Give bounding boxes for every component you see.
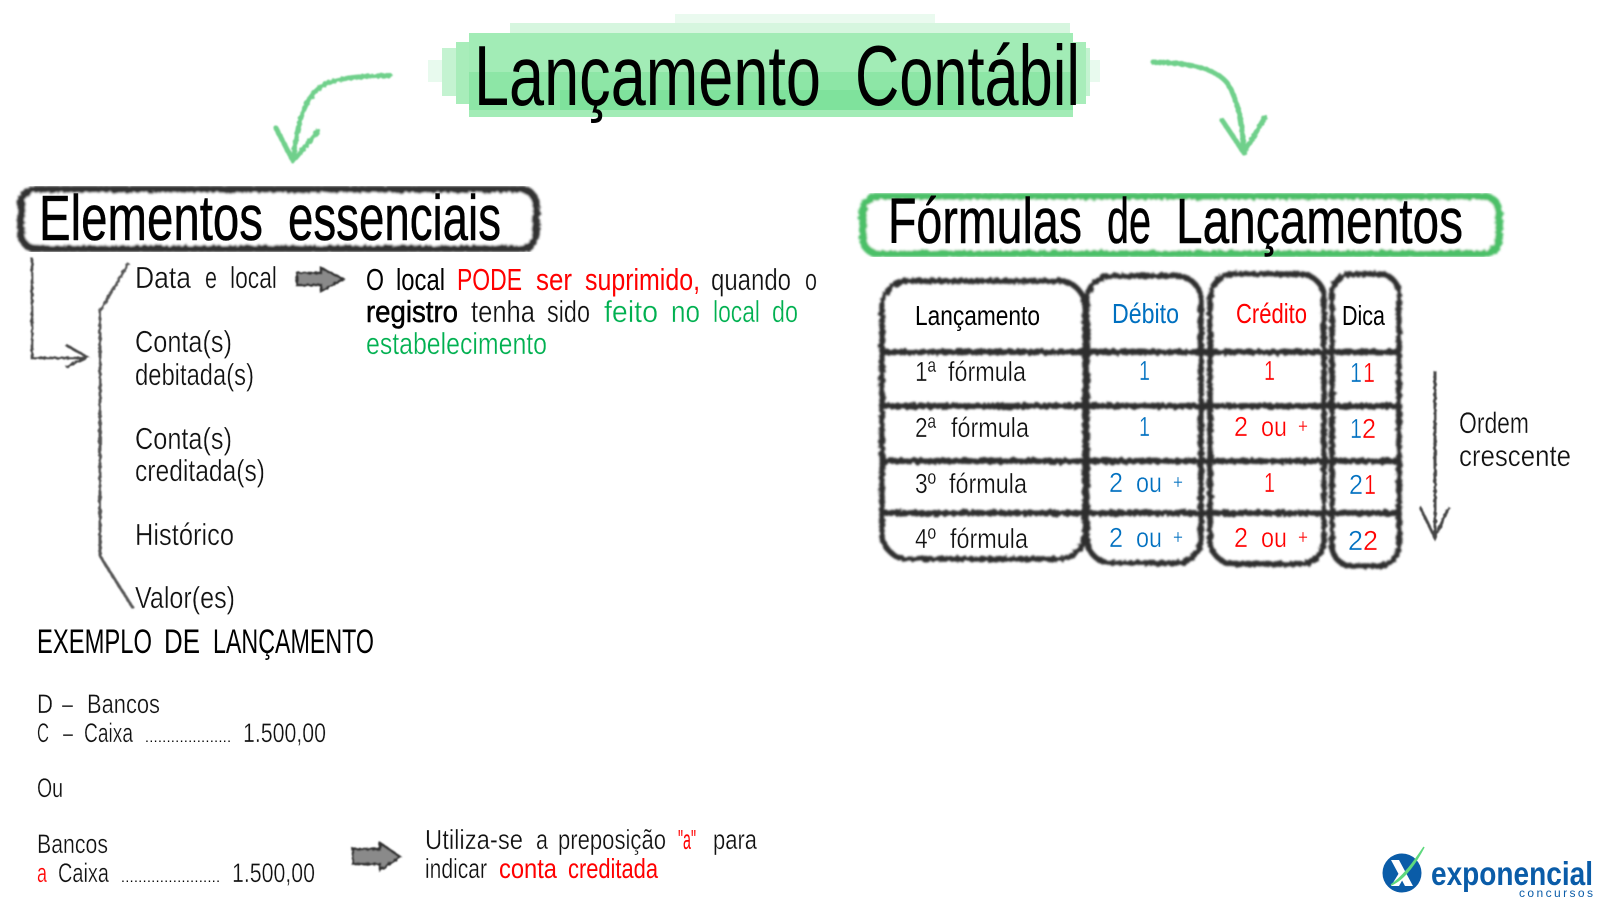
table: row 2: fórmula [951, 412, 1029, 443]
table: row 2 [915, 411, 1376, 444]
example entry 1: 1.500,00 [243, 718, 326, 748]
table: row 2: ou [1261, 411, 1287, 442]
arrow: title to Fórmulas de Lançamentos [1153, 62, 1265, 153]
table: row 2: 2ª [915, 412, 937, 443]
table: row 3: 1 [1364, 469, 1376, 500]
list of essential elements: e [205, 260, 217, 295]
heading text [39, 182, 501, 254]
note on preposition: preposição [558, 824, 666, 855]
table: row 3: 2 [1109, 467, 1123, 498]
table: row 1: 1 [1264, 355, 1275, 386]
table: column headers [915, 298, 1385, 331]
table: row 2: 2 [1362, 413, 1376, 444]
note on local: registro [366, 294, 458, 329]
table: row 4: 2 [1348, 525, 1363, 556]
note on local: ser [536, 262, 572, 297]
icon: gray arrow to note [297, 268, 343, 291]
example entry 1: C [37, 718, 49, 748]
example heading [37, 623, 374, 661]
example entry 2: 1.500,00 [232, 858, 315, 888]
table: row 2: 2 [1234, 411, 1248, 442]
list of essential elements [135, 260, 277, 615]
table: row 2: + [1298, 416, 1308, 438]
heading text: Elementos [39, 182, 263, 254]
table: row 1: fórmula [948, 356, 1026, 387]
example heading: LANÇAMENTO [213, 623, 374, 661]
table: row 1: 1 [1350, 357, 1362, 388]
note on local: quando [711, 262, 791, 297]
list of essential elements: debitada(s) [135, 357, 254, 392]
bracket around element list [100, 263, 133, 608]
label: ascending order: crescente [1459, 440, 1571, 473]
heading frame [863, 196, 1499, 254]
arrow: heading to list [32, 258, 87, 367]
example entry 1 [37, 689, 326, 748]
note on preposition [425, 824, 757, 884]
example entry 1: – [62, 689, 73, 719]
note on local: local [713, 294, 760, 329]
note on local: feito [604, 294, 658, 329]
heading text [888, 185, 1463, 257]
heading text: essenciais [288, 182, 501, 254]
note on preposition: a [536, 824, 548, 855]
logo icon [1382, 847, 1424, 892]
table: row 3: 1 [1264, 467, 1275, 498]
example heading: DE [164, 623, 200, 661]
example entry 2 [37, 829, 315, 888]
list of essential elements: creditada(s) [135, 453, 265, 488]
table: row 4: + [1298, 527, 1308, 549]
icon: gray arrow to preposition note [353, 843, 400, 870]
list of essential elements: local [230, 260, 277, 295]
example entry 2: Bancos [37, 829, 108, 859]
note on local: estabelecimento [366, 326, 547, 361]
table: row 4: fórmula [950, 523, 1028, 554]
note on local: suprimido, [585, 262, 700, 297]
example entry 1: – [63, 718, 73, 748]
example entry 2: Caixa [58, 858, 110, 888]
table: column headers: Lançamento [915, 300, 1040, 331]
table: row 4: 2 [1234, 522, 1248, 553]
note on local: tenha [471, 294, 536, 329]
note on local: local [396, 262, 445, 297]
list of essential elements: Conta(s) [135, 421, 232, 456]
table: row 2: 1 [1139, 411, 1150, 442]
note on local [366, 262, 817, 361]
note on preposition: para [713, 824, 757, 855]
table: row 4: 2 [1363, 525, 1378, 556]
note on preposition: "a" [678, 824, 696, 855]
note on local: o [805, 262, 817, 297]
note on local: sido [547, 294, 590, 329]
table: row 3: + [1173, 472, 1183, 494]
note on preposition: conta [499, 853, 557, 884]
panel: Elementos essenciais heading [21, 182, 536, 254]
list of essential elements: Data [135, 260, 192, 295]
table: row 1: 1 [1139, 355, 1150, 386]
table: row 4: ou [1261, 522, 1287, 553]
table: row 4: 2 [1109, 522, 1123, 553]
heading text: Fórmulas [888, 185, 1082, 257]
arrow: title to Elementos essenciais [276, 76, 390, 161]
example entry 1: Bancos [87, 689, 160, 719]
logo: Exponencial Concursos [1382, 847, 1593, 900]
example entry 1: .................... [145, 729, 231, 745]
table: row 3: fórmula [949, 468, 1027, 499]
note on local: O [366, 262, 384, 297]
list of essential elements: Conta(s) [135, 324, 232, 359]
table: column headers: Dica [1342, 300, 1385, 331]
table frame [882, 274, 1401, 566]
heading text: Lançamentos [1176, 185, 1463, 257]
table: row 3: 3º [915, 468, 936, 499]
label: ascending order: Ordem [1459, 407, 1529, 440]
arrow: ascending order [1420, 371, 1449, 538]
title: Contábil [855, 29, 1080, 124]
example entry 1: Caixa [84, 718, 134, 748]
table: row 4: ou [1136, 522, 1162, 553]
note on local: do [772, 294, 798, 329]
table: row 4: 4º [915, 523, 936, 554]
note on preposition: creditada [568, 853, 658, 884]
example entry 2: ....................... [121, 869, 220, 885]
table: column headers: Débito [1112, 298, 1179, 329]
title highlight [428, 14, 1100, 117]
note on preposition: Utiliza-se [425, 824, 523, 855]
table: row 4: + [1173, 527, 1183, 549]
table: row 2: 1 [1350, 413, 1362, 444]
heading text: de [1107, 185, 1151, 257]
list of essential elements: Histórico [135, 517, 234, 552]
example entry 1: D [37, 689, 53, 719]
example heading: EXEMPLO [37, 623, 152, 661]
table: row 3: 2 [1349, 469, 1363, 500]
table: row 3 [915, 467, 1376, 500]
example entry 2: a [37, 858, 48, 888]
table: column headers: Crédito [1236, 298, 1307, 329]
heading frame [21, 189, 536, 249]
table: row 4 [915, 522, 1378, 556]
logo tagline: concursos [1519, 886, 1593, 900]
table: row 1: 1ª [915, 356, 937, 387]
table: row 1 [915, 355, 1375, 388]
note on local: PODE [457, 262, 522, 297]
table: row 1: 1 [1363, 357, 1375, 388]
list of essential elements: Valor(es) [135, 580, 235, 615]
title: Lançamento [474, 29, 821, 124]
or: Ou [37, 773, 63, 803]
panel: Fórmulas heading [863, 185, 1499, 257]
note on preposition: indicar [425, 853, 487, 884]
label: ascending order [1459, 407, 1571, 473]
table: row 3: ou [1136, 467, 1162, 498]
note on local: no [671, 294, 700, 329]
